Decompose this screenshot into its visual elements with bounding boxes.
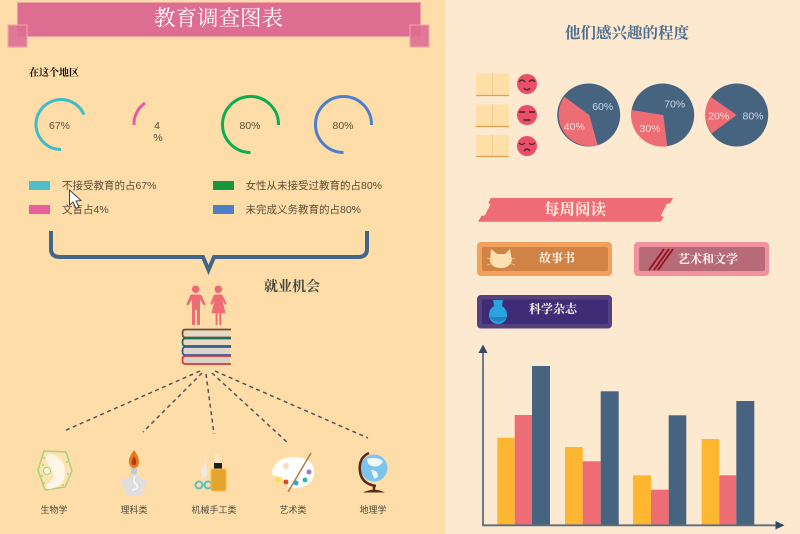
pie chart: 60/40: 60%: [592, 101, 613, 113]
label: biology: 生物学: [40, 504, 68, 515]
legend: 不接受教育的占67%: [62, 179, 157, 192]
label: mechanical and crafts: 机械手工类: [191, 504, 237, 515]
chart axes: [478, 344, 784, 530]
ring chart: 67%: [36, 99, 84, 150]
icon: man and woman: [186, 286, 227, 325]
legend: [29, 179, 382, 216]
icon: open book 2: [476, 104, 509, 127]
icon: flask: [489, 300, 507, 324]
button: art and literature: [634, 242, 769, 276]
ring chart: 4%: 4: [154, 120, 160, 132]
label: science: 理科类: [120, 504, 148, 515]
icon: happy face: [516, 73, 538, 95]
icon: globe: [360, 453, 388, 492]
heading: job opportunities: 就业机会: [264, 278, 320, 295]
weekly reading ribbon: 每周阅读: [544, 200, 606, 218]
ring chart: 4%: %: [153, 132, 163, 144]
icon: mouse cursor: [70, 190, 81, 208]
legend: 文盲占4%: [62, 203, 109, 216]
ring chart: 80% blue: [316, 97, 372, 152]
ring chart: 80% green: 80%: [239, 120, 261, 132]
button: art and literature: 艺术和文学: [678, 251, 738, 266]
ring chart: 80% blue: 80%: [332, 120, 354, 132]
title banner: 教育调查图表: [154, 6, 283, 30]
icon: paint palette: [272, 453, 314, 492]
icon: neutral face: [516, 104, 538, 126]
title banner: [8, 2, 429, 47]
dashed connectors: [64, 371, 368, 443]
button: story books: [477, 242, 612, 276]
icon: cat: [487, 249, 515, 268]
bar chart: [478, 344, 784, 530]
ring chart: 4%: [134, 103, 163, 144]
legend: 女性从未接受过教育的占80%: [246, 179, 382, 192]
legend: 未完成义务教育的占80%: [246, 203, 361, 216]
icon: sad face: [516, 135, 538, 157]
button: science magazines: [477, 295, 612, 328]
icon: diagonal stripes: [649, 249, 673, 270]
icon: open book 1: [476, 74, 509, 96]
pie chart: 80/20: 80%: [742, 110, 764, 122]
pie chart: 60/40: 40%: [564, 121, 585, 133]
pie chart: 70/30: 30%: [639, 123, 661, 135]
label: art: 艺术类: [279, 504, 307, 515]
pie chart: 80/20: [705, 84, 768, 146]
icon: plant cell: [38, 451, 72, 490]
button: science magazines: 科学杂志: [529, 301, 578, 316]
brace connector: [51, 231, 367, 270]
pie chart: 70/30: 70%: [664, 98, 685, 110]
icon: stack of books: [182, 330, 231, 364]
icon: open book 3: [476, 135, 509, 157]
heading: level of interest: 他们感兴趣的程度: [565, 23, 689, 42]
pie chart: 80/20: 20%: [708, 110, 729, 122]
button: story books: 故事书: [539, 250, 576, 265]
icon: scissors and glue bottle: [196, 453, 226, 491]
ring chart: 67%: 67%: [49, 120, 70, 132]
label: geography: 地理学: [359, 504, 387, 515]
ring chart: 80% green: [223, 97, 279, 152]
pie chart: 70/30: [631, 84, 694, 147]
weekly reading ribbon: [478, 198, 673, 222]
heading: in this region: 在这个地区: [29, 66, 79, 79]
pie chart: 60/40: [557, 84, 620, 146]
icon: alcohol lamp: [121, 450, 147, 495]
